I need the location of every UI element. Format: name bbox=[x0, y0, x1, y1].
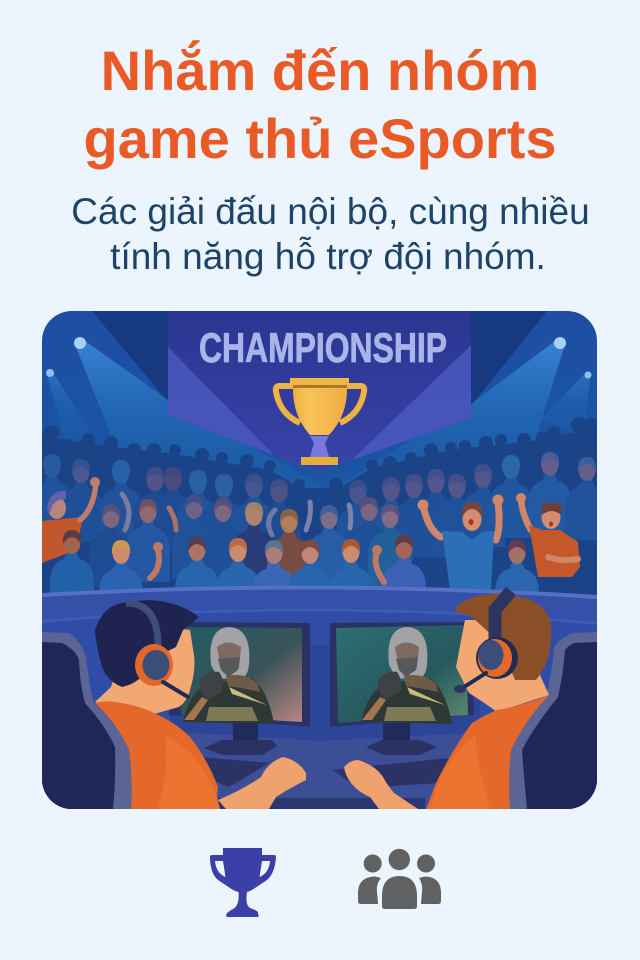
subtitle: Các giải đấu nội bộ, cùng nhiều bbox=[71, 191, 590, 232]
right gamer sleeve shade bbox=[430, 735, 490, 809]
left orange spectator bbox=[42, 477, 100, 563]
crowd: back silhouettes bbox=[42, 417, 599, 600]
left gamer skin bbox=[95, 625, 194, 714]
left gamer bbox=[95, 600, 306, 809]
left gamer sleeve shade bbox=[158, 735, 220, 809]
cheering spectator in blue bbox=[418, 494, 504, 590]
banner text: CHAMPIONSHIP bbox=[199, 324, 447, 371]
dark ceiling wedges bbox=[92, 311, 547, 406]
banner bbox=[168, 311, 471, 470]
crowd: middle rows bbox=[30, 452, 609, 563]
right monitor bbox=[330, 622, 474, 755]
spotlights bbox=[46, 337, 592, 471]
left gamer shirt bbox=[95, 701, 220, 809]
left arm and hand bbox=[218, 757, 306, 809]
right gamer skin bbox=[456, 620, 549, 712]
left gamer chair bbox=[42, 632, 132, 809]
right headset bbox=[454, 591, 518, 693]
title: game thủ eSports bbox=[84, 107, 556, 170]
left monitor bbox=[169, 622, 310, 755]
subtitle: tính năng hỗ trợ đội nhóm. bbox=[110, 236, 546, 277]
icon: team of people bbox=[358, 849, 441, 909]
illustration panel: championship arena bbox=[30, 311, 609, 809]
crowd: fourth row bbox=[89, 494, 412, 592]
title bbox=[84, 39, 556, 170]
right arm and hand bbox=[344, 760, 418, 809]
desk bbox=[42, 733, 597, 809]
icon: trophy bbox=[210, 848, 276, 917]
cheering spectator in orange bbox=[516, 493, 580, 577]
crowd: front row bbox=[50, 530, 539, 592]
right gamer bbox=[344, 591, 551, 809]
right gamer shirt bbox=[426, 695, 549, 809]
left headset bbox=[126, 603, 188, 697]
title: Nhắm đến nhóm bbox=[101, 39, 539, 102]
left gamer hair bbox=[95, 600, 199, 687]
subtitle bbox=[71, 191, 590, 277]
right gamer hair bbox=[454, 594, 551, 680]
arena wall and rail bbox=[42, 585, 597, 809]
right gamer chair bbox=[509, 632, 597, 809]
keyboards bbox=[201, 757, 449, 788]
gold trophy bbox=[276, 378, 364, 465]
raised arms, muted bbox=[122, 494, 351, 535]
infographic canvas bbox=[42, 40, 597, 917]
